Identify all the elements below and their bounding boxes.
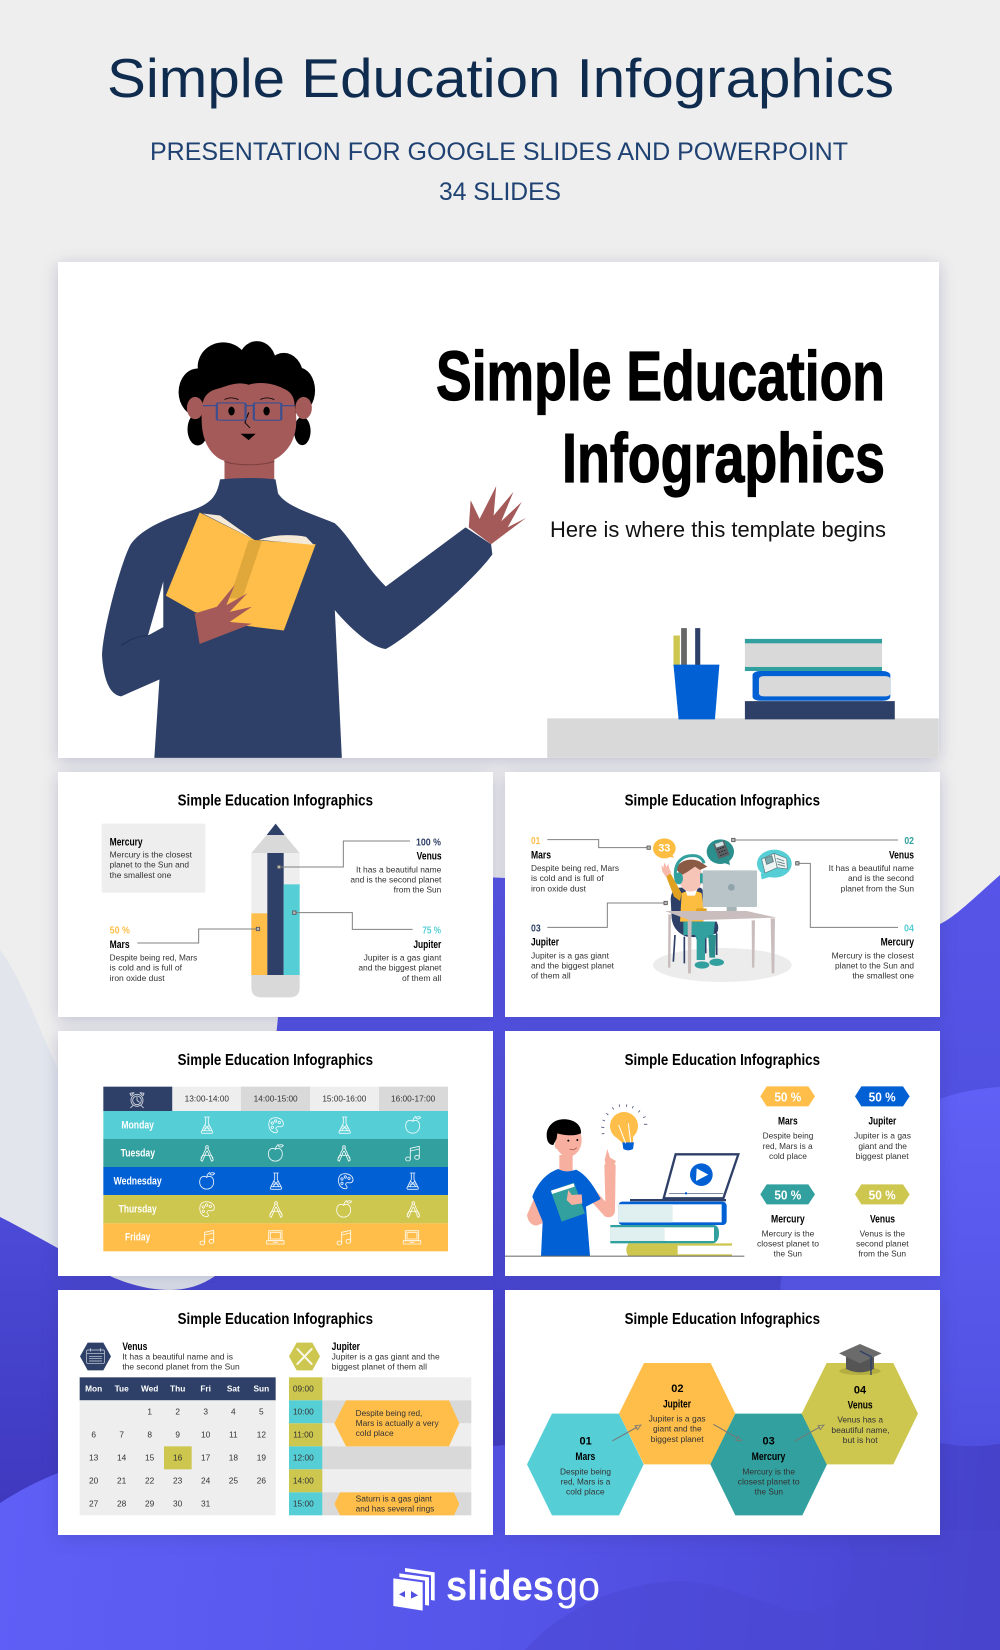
text block: Mercury xyxy=(832,923,915,981)
calendar: 7 xyxy=(119,1430,124,1440)
calendar: Tue xyxy=(115,1384,129,1394)
calendar: 10 xyxy=(201,1430,211,1440)
stat: Mars: 50 % xyxy=(774,1090,801,1104)
arrow: Mars to Jupiter xyxy=(612,1425,641,1441)
icon: light bulb xyxy=(601,1104,647,1150)
table row: Friday xyxy=(103,1223,448,1251)
text block: Jupiter: of them all xyxy=(402,973,441,983)
text block: Jupiter: Jupiter xyxy=(531,937,560,949)
calendar: 24 xyxy=(201,1476,211,1486)
calendar: 5 xyxy=(259,1407,264,1417)
slide heading: Simple Education Infographics xyxy=(625,1052,820,1069)
calendar: 19 xyxy=(257,1453,266,1463)
stat: Mercury: closest planet to xyxy=(757,1239,819,1249)
stat: Mars: cold place xyxy=(769,1151,807,1161)
stat: Mars: Mars xyxy=(778,1115,798,1127)
stat: Mars: Despite being xyxy=(763,1131,814,1141)
illustration: student with book xyxy=(527,1119,616,1256)
text block: Mars: iron oxide dust xyxy=(110,973,165,983)
text block: Venus: and is the second xyxy=(848,873,914,883)
stat: Venus: Venus is the xyxy=(860,1228,905,1238)
hexagon: Venus: Venus xyxy=(848,1400,873,1412)
hexagon: Venus: 04 xyxy=(854,1384,867,1396)
hexagon: Mercury: Mercury is the xyxy=(742,1466,795,1476)
text block: Venus: 02 xyxy=(904,836,914,847)
calendar: 9 xyxy=(175,1430,180,1440)
text block: Jupiter: and the biggest planet xyxy=(358,963,442,973)
stat: Jupiter: biggest planet xyxy=(856,1151,909,1161)
hexagon: Mercury: 03 xyxy=(763,1436,775,1448)
callout: Saturn event xyxy=(334,1492,459,1515)
text block: Jupiter: of them all xyxy=(531,971,571,981)
text block: Venus: Venus xyxy=(122,1341,147,1353)
calendar: 26 xyxy=(257,1476,266,1486)
hexagon: Venus: beautiful name, xyxy=(831,1425,890,1435)
stat: Jupiter: Jupiter is a gas xyxy=(854,1131,911,1141)
text block: Mars: is cold and is full of xyxy=(531,873,604,883)
callout: Mars event xyxy=(334,1400,459,1446)
panel: hexagon process slide xyxy=(505,1290,940,1535)
hexagon: Jupiter: 02 xyxy=(671,1383,683,1395)
calendar: Fri xyxy=(200,1384,211,1394)
calendar: 28 xyxy=(117,1499,127,1509)
panel: weekly timetable slide xyxy=(58,1031,493,1276)
calendar: 30 xyxy=(173,1499,183,1509)
calendar: Thu xyxy=(170,1384,185,1394)
panel: idea student slide xyxy=(505,1031,940,1276)
calendar: Sat xyxy=(227,1384,240,1394)
table row: Thursday: Thursday xyxy=(119,1204,157,1216)
stat: Jupiter: 50 % xyxy=(869,1090,896,1104)
arrow: Jupiter to Mercury xyxy=(713,1424,742,1441)
table row: Wednesday xyxy=(103,1167,448,1195)
table row: Friday: Friday xyxy=(125,1232,150,1244)
connector: Jupiter xyxy=(547,901,667,927)
text block: Venus: 100 % xyxy=(416,837,441,848)
slide heading: Simple Education Infographics xyxy=(178,1311,373,1328)
stat: Venus: from the Sun xyxy=(858,1249,906,1259)
slide subtitle: Here is where this template begins xyxy=(550,517,886,542)
stat: Mercury: the Sun xyxy=(774,1249,802,1259)
schedule table: 11:00 xyxy=(293,1430,314,1440)
stat: Jupiter xyxy=(854,1086,911,1161)
hexagon: Jupiter xyxy=(619,1363,735,1464)
calendar xyxy=(80,1377,276,1515)
text block: Mars: is cold and is full of xyxy=(110,963,183,973)
hexagon: Mars: red, Mars is a xyxy=(561,1476,611,1486)
text block: Jupiter: 75 % xyxy=(422,925,441,936)
schedule table xyxy=(289,1377,471,1515)
calendar: Wed xyxy=(141,1384,158,1394)
text block: Mars: iron oxide dust xyxy=(531,883,587,893)
stat: Mercury: Mercury is the xyxy=(762,1228,815,1238)
callout: Mars event: cold place xyxy=(356,1428,394,1438)
text block: Jupiter: Jupiter xyxy=(413,939,442,951)
text box: Mercury xyxy=(102,824,205,893)
calendar: 23 xyxy=(173,1476,183,1486)
text block: Jupiter: Jupiter is a gas giant xyxy=(364,953,442,963)
text block: Mars: Despite being red, Mars xyxy=(110,953,197,963)
calendar: 12 xyxy=(257,1430,266,1440)
icon: pencil and ruler hexagon xyxy=(289,1343,320,1370)
slide heading: Simple Education Infographics xyxy=(625,1311,820,1328)
hexagon: Venus xyxy=(802,1363,918,1464)
text block: Jupiter: Jupiter is a gas giant and the xyxy=(332,1351,440,1361)
stat: Mars: red, Mars is a xyxy=(763,1141,813,1151)
calendar: 11 xyxy=(229,1430,238,1440)
wordmark: slides: slides xyxy=(446,1562,554,1609)
text block: Venus: It has a beautiful name and is xyxy=(122,1351,233,1361)
text block: Venus: planet from the Sun xyxy=(841,883,914,893)
calendar: Sun xyxy=(253,1384,269,1394)
text box: Mercury: the smallest one xyxy=(110,870,172,880)
hexagon: Mars: Despite being xyxy=(560,1466,611,1476)
icon: alarm clock xyxy=(130,1093,144,1108)
calendar: 2 xyxy=(175,1407,180,1417)
illustration: teacher with book xyxy=(102,341,526,758)
connector: Jupiter xyxy=(293,911,413,929)
table row: Monday: Monday xyxy=(121,1120,154,1132)
calendar: 17 xyxy=(201,1453,211,1463)
schedule table: 09:00 xyxy=(293,1384,314,1394)
table header: 13:00-14:00 xyxy=(185,1094,229,1104)
table header xyxy=(103,1087,448,1111)
hexagon: Mars: 01 xyxy=(580,1436,592,1448)
icon: calculator bubble xyxy=(707,839,734,865)
text block: Mercury: the smallest one xyxy=(852,971,914,981)
calendar: 8 xyxy=(147,1430,152,1440)
text block: Venus: Venus xyxy=(417,851,442,863)
panel: calendar and schedule slide xyxy=(58,1290,493,1535)
calendar: 25 xyxy=(229,1476,238,1486)
page subtitle line 2: 34 SLIDES xyxy=(439,178,561,206)
text block: Venus xyxy=(350,837,442,895)
text block: Jupiter xyxy=(358,925,442,983)
text block: Mars xyxy=(531,836,619,893)
connector: Mars xyxy=(137,927,260,943)
connector: Venus xyxy=(277,841,410,869)
hexagon: Mars: Mars xyxy=(575,1451,595,1463)
table row: Thursday xyxy=(103,1195,448,1223)
calendar: 18 xyxy=(229,1453,238,1463)
text block: Mars: Despite being red, Mars xyxy=(531,863,619,873)
hexagon: Jupiter: Jupiter xyxy=(663,1398,692,1410)
connector: Venus xyxy=(732,838,898,842)
connector: Mercury xyxy=(796,862,898,927)
slide heading: Simple Education Infographics xyxy=(178,1052,373,1069)
logo: slidesgo xyxy=(393,1562,600,1611)
calendar: 1 xyxy=(147,1407,152,1417)
panel: student at computer slide xyxy=(505,772,940,1017)
calendar: 22 xyxy=(145,1476,155,1486)
stat: Mars xyxy=(760,1086,815,1161)
schedule table: 15:00 xyxy=(293,1499,314,1509)
text box: Mercury: Mercury xyxy=(110,836,143,848)
text box: Mercury: planet to the Sun and xyxy=(110,860,189,870)
calendar: 29 xyxy=(145,1499,155,1509)
calendar: 15 xyxy=(145,1453,155,1463)
stat: Mercury: Mercury xyxy=(771,1213,805,1225)
hexagon: Mercury: Mercury xyxy=(752,1451,786,1463)
hexagon: Venus: Venus has a xyxy=(837,1415,883,1425)
text block: Mercury: Mercury is the closest xyxy=(832,950,915,960)
table header: 14:00-15:00 xyxy=(254,1094,298,1104)
icon: calendar hexagon xyxy=(80,1343,111,1370)
stat: Jupiter: Jupiter xyxy=(868,1115,897,1127)
text block: Mars: Mars xyxy=(110,939,130,951)
panel: main title slide xyxy=(58,262,939,758)
callout: Saturn event: Saturn is a gas giant xyxy=(356,1493,433,1503)
schedule table: 10:00 xyxy=(293,1407,314,1417)
schedule table: 14:00 xyxy=(293,1476,314,1486)
chart: pencil bars xyxy=(251,824,300,997)
stat: Mercury xyxy=(757,1184,819,1259)
text block: Jupiter: biggest planet of them all xyxy=(332,1361,427,1371)
text block: Mars: Mars xyxy=(531,849,551,861)
text block: Jupiter: 03 xyxy=(531,923,541,934)
slide title line 2: Infographics xyxy=(562,419,885,497)
calendar: 20 xyxy=(89,1476,99,1486)
text box: Mercury: Mercury is the closest xyxy=(110,850,193,860)
calendar: 16 xyxy=(173,1453,183,1463)
stat: Mercury: 50 % xyxy=(774,1188,801,1202)
connector: Mars xyxy=(547,840,650,849)
table header: 16:00-17:00 xyxy=(391,1094,436,1104)
stat: Jupiter: giant and the xyxy=(858,1141,907,1151)
calendar: 14 xyxy=(117,1453,127,1463)
illustration: books stack xyxy=(505,1202,744,1257)
text block: Jupiter: Jupiter xyxy=(332,1341,361,1353)
text block: Jupiter: Jupiter is a gas giant xyxy=(531,950,610,960)
text block: Mars xyxy=(110,925,197,983)
text block: Jupiter xyxy=(531,923,615,981)
text block: Venus: the second planet from the Sun xyxy=(122,1361,240,1371)
hexagon: Jupiter: Jupiter is a gas xyxy=(649,1414,706,1424)
calendar: 21 xyxy=(117,1476,127,1486)
hexagon: Mercury: the Sun xyxy=(755,1487,783,1497)
icon: yellow speech bubble xyxy=(653,838,676,858)
text block: Mercury: Mercury xyxy=(881,937,915,949)
text block: Venus: from the Sun xyxy=(394,885,442,895)
text block: Venus xyxy=(122,1341,240,1371)
illustration: student at desk xyxy=(653,856,792,982)
text block: Venus: It has a beautiful name xyxy=(829,863,914,873)
text block: Mercury: planet to the Sun and xyxy=(835,961,914,971)
callout: Mars event: Despite being red, xyxy=(356,1408,422,1418)
hexagon: Jupiter: giant and the xyxy=(653,1424,702,1434)
calendar: 31 xyxy=(201,1499,211,1509)
icon: stacked slides xyxy=(393,1568,435,1611)
table header: 15:00-16:00 xyxy=(322,1094,367,1104)
schedule table: 12:00 xyxy=(293,1453,314,1463)
table row: Tuesday: Tuesday xyxy=(121,1148,155,1160)
stat: Venus: Venus xyxy=(870,1213,895,1225)
calendar: 4 xyxy=(231,1407,236,1417)
hexagon: Mercury: closest planet to xyxy=(738,1476,800,1486)
icon: book bubble xyxy=(757,850,792,879)
callout: Mars event: Mars is actually a very xyxy=(356,1418,439,1428)
panel: pencil percentages slide xyxy=(58,772,493,1017)
icon: yellow speech bubble: 33 xyxy=(658,842,670,854)
calendar: 13 xyxy=(89,1453,99,1463)
table row: Tuesday xyxy=(103,1139,448,1167)
stat: Venus: second planet xyxy=(856,1239,909,1249)
page title: Simple Education Infographics xyxy=(107,47,894,109)
calendar: Mon xyxy=(85,1384,102,1394)
text block: Jupiter: and the biggest planet xyxy=(531,961,615,971)
slide heading: Simple Education Infographics xyxy=(625,793,820,810)
icon: graduation cap xyxy=(839,1344,882,1375)
text block: Mars: 50 % xyxy=(110,925,130,936)
calendar: 6 xyxy=(91,1430,96,1440)
hexagon: Jupiter: biggest planet xyxy=(651,1434,704,1444)
text block: Jupiter xyxy=(332,1341,440,1371)
text block: Mars: 01 xyxy=(531,836,541,847)
stat: Venus xyxy=(855,1184,910,1259)
illustration: laptop with play button xyxy=(630,1154,738,1201)
table row: Wednesday: Wednesday xyxy=(114,1176,162,1188)
table row: Monday xyxy=(103,1111,448,1139)
hexagon: Mercury xyxy=(710,1414,827,1515)
text block: Venus xyxy=(829,836,914,893)
hexagon: Mars: cold place xyxy=(566,1487,605,1497)
illustration: desk, pencil cup and books xyxy=(547,628,939,758)
text block: Venus: and is the second planet xyxy=(350,874,442,884)
calendar: 27 xyxy=(89,1499,99,1509)
page subtitle line 1: PRESENTATION FOR GOOGLE SLIDES AND POWERPOINT xyxy=(150,138,848,166)
stat: Venus: 50 % xyxy=(869,1188,896,1202)
slide heading: Simple Education Infographics xyxy=(178,793,373,810)
callout: Saturn event: and has several rings xyxy=(356,1503,434,1513)
hexagon: Venus: but is hot xyxy=(843,1435,878,1445)
calendar: 3 xyxy=(203,1407,208,1417)
hexagon: Mars xyxy=(527,1414,644,1515)
text block: Venus: Venus xyxy=(889,849,914,861)
text block: Venus: It has a beautiful name xyxy=(356,864,442,874)
arrow: Mercury to Venus xyxy=(795,1425,824,1441)
wordmark: go: go xyxy=(556,1563,600,1609)
text block: Mercury: 04 xyxy=(904,923,914,934)
